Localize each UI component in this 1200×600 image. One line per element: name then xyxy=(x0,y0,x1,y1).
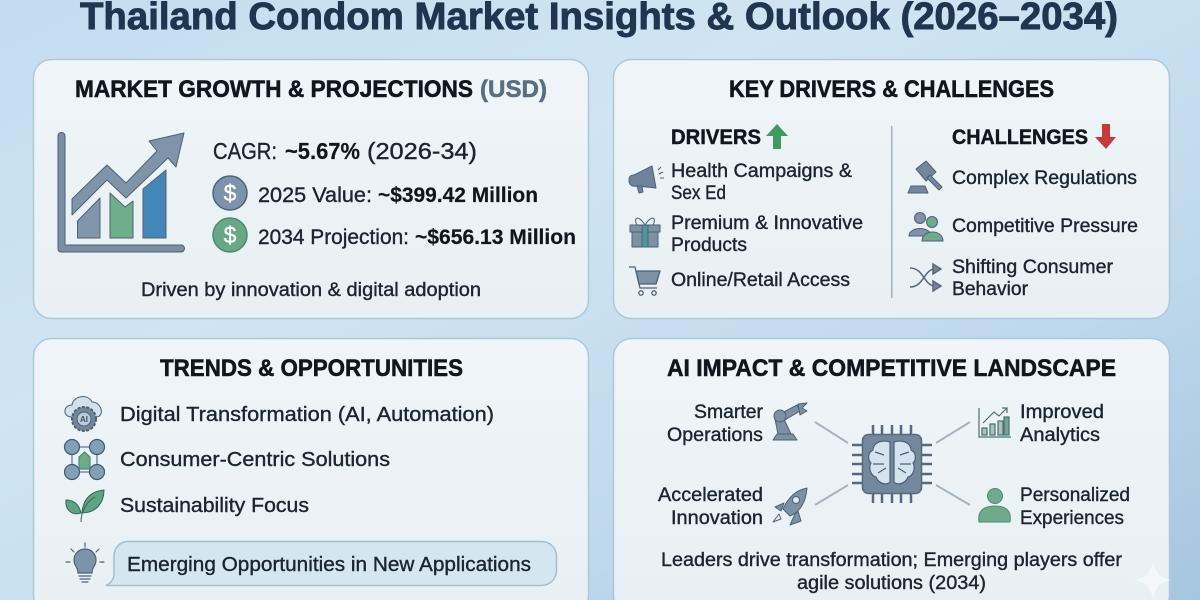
icon: AI brain chip xyxy=(852,425,932,503)
challenge: complex regulations: Complex Regulations xyxy=(952,168,1137,189)
driver: premium products: Premium & Innovative xyxy=(671,213,863,234)
label: smarter operations xyxy=(667,402,764,446)
cagr line: CAGR: xyxy=(213,138,277,164)
driver: health campaigns: Health Campaigns & xyxy=(671,161,852,182)
label: personalized experiences: Personalized xyxy=(1020,485,1130,506)
label: accelerated innovation xyxy=(658,485,763,529)
icon: sparkle watermark xyxy=(1134,560,1172,600)
label: improved analytics: Improved xyxy=(1020,402,1104,423)
heading: market growth: (USD) xyxy=(480,76,547,103)
challenge: competitive pressure: Competitive Pressure xyxy=(952,216,1138,237)
driver: health campaigns: Sex Ed xyxy=(671,183,726,204)
icon: shuffle xyxy=(910,264,941,291)
icon: megaphone xyxy=(629,166,664,193)
2025 value: 2025 Value: xyxy=(258,184,372,207)
2025 value: ~$399.42 Million xyxy=(378,184,538,207)
heading: AI impact: AI IMPACT & COMPETITIVE LANDSCAPE xyxy=(667,355,1116,382)
trend: consumer-centric: Consumer-Centric Solutions xyxy=(120,448,390,471)
icon: rocket xyxy=(773,488,807,525)
heading: trends: TRENDS & OPPORTUNITIES xyxy=(160,355,463,382)
icon: light bulb xyxy=(66,543,104,582)
panel: market growth and projections xyxy=(34,60,588,318)
drivers heading: DRIVERS xyxy=(671,126,761,149)
callout: emerging opportunities: Emerging Opportunities in New Applications xyxy=(127,554,531,576)
2034 projection: $ xyxy=(224,222,237,248)
driver: health campaigns xyxy=(671,161,852,204)
icon: cart xyxy=(629,267,660,295)
callout: emerging opportunities xyxy=(106,542,556,586)
label: smarter operations: Smarter xyxy=(694,402,764,423)
driver: premium products: Products xyxy=(671,235,747,256)
label: improved analytics: Analytics xyxy=(1020,425,1100,446)
competitive note xyxy=(661,550,1123,594)
label: smarter operations: Operations xyxy=(667,425,763,446)
panel: key drivers and challenges xyxy=(614,60,1170,318)
2034 projection xyxy=(213,218,576,252)
challenge: shifting behaviour xyxy=(952,257,1114,300)
label: accelerated innovation: Innovation xyxy=(671,508,763,529)
label: accelerated innovation: Accelerated xyxy=(658,485,763,506)
icon: growth chart xyxy=(58,132,184,252)
icon: AI cloud gear: AI xyxy=(80,415,88,424)
cagr line: ~5.67% xyxy=(285,138,360,164)
cagr line: (2026-34) xyxy=(367,138,477,164)
heading: market growth: MARKET GROWTH & PROJECTIONS xyxy=(75,76,473,103)
icon: people xyxy=(909,212,943,241)
driver: online retail: Online/Retail Access xyxy=(671,270,850,291)
label: personalized experiences: Experiences xyxy=(1020,508,1124,529)
challenges heading: CHALLENGES xyxy=(952,126,1088,149)
connector lines xyxy=(815,422,970,505)
trend: digital transformation: Digital Transformation (AI, Automation) xyxy=(120,403,494,426)
trend: sustainability: Sustainability Focus xyxy=(120,494,309,517)
icon: person xyxy=(979,488,1010,522)
icon: robot arm xyxy=(773,403,807,440)
challenge: shifting behaviour: Shifting Consumer xyxy=(952,257,1114,278)
cagr line xyxy=(213,138,477,164)
panel: trends and opportunities xyxy=(34,338,588,600)
competitive note: agile solutions (2034) xyxy=(797,573,986,594)
icon: leaves xyxy=(66,490,104,522)
competitive note: Leaders drive transformation; Emerging players offer xyxy=(661,550,1123,571)
2025 value xyxy=(213,176,538,210)
icon: AI cloud gear xyxy=(65,397,101,431)
2025 value: $ xyxy=(224,180,237,206)
driver: premium products xyxy=(671,213,863,256)
growth note: Driven by innovation & digital adoption xyxy=(141,280,481,301)
2034 projection: 2034 Projection: xyxy=(258,226,409,249)
icon: gavel xyxy=(908,161,942,193)
challenge: shifting behaviour: Behavior xyxy=(952,279,1029,300)
panel: AI impact and competitive landscape xyxy=(614,338,1172,600)
label: improved analytics xyxy=(1020,402,1104,446)
icon: consumer network xyxy=(64,440,104,480)
2034 projection: ~$656.13 Million xyxy=(415,226,576,249)
label: personalized experiences xyxy=(1020,485,1130,529)
icon: analytics chart xyxy=(979,408,1011,437)
heading: key drivers: KEY DRIVERS & CHALLENGES xyxy=(729,76,1054,103)
icon: gift xyxy=(630,218,660,247)
